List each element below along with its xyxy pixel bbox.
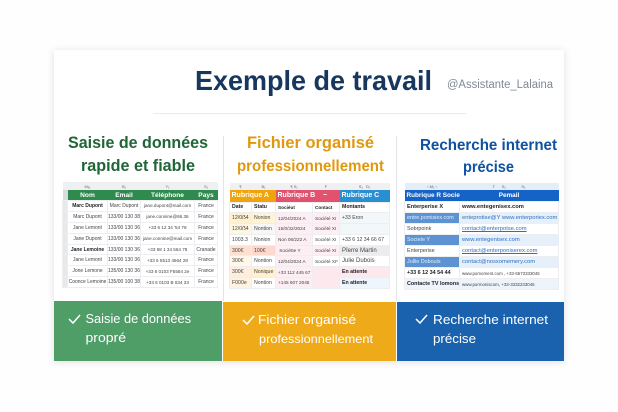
spreadsheet: data entry: Jane Lemont [73, 257, 102, 263]
spreadsheet: organised file: +145 607 2045 [278, 280, 309, 285]
spreadsheet: data entry: 133/00 130 36 [108, 246, 140, 252]
green band label [69, 311, 191, 345]
spreadsheet: data entry: Email [115, 192, 133, 198]
spreadsheet: organised file: 100€ [254, 248, 266, 254]
spreadsheet: data entry: France [198, 268, 214, 274]
orange band: organised file [223, 302, 396, 361]
spreadsheet: internet research: entre.pomisiex.com [407, 215, 454, 221]
green band: clean data entry [54, 301, 222, 361]
spreadsheet: data entry: jane.dupont@mail.com [144, 203, 191, 208]
heading: data entry: rapide et fiable [81, 157, 195, 175]
spreadsheet: internet research: Enterperise X [407, 204, 443, 210]
spreadsheet: data entry: Marc Dupont [73, 214, 102, 220]
green band label: propré [86, 330, 126, 345]
spreadsheet: data entry: France [198, 257, 214, 263]
spreadsheet: data entry [62, 182, 218, 288]
spreadsheet: organised file [229, 183, 390, 289]
spreadsheet: organised file: +33 112 445 67 [278, 270, 310, 275]
spreadsheet: internet research: +33 6 12 34 54 44 [407, 270, 451, 276]
spreadsheet: organised file: Sociétte Y [279, 248, 301, 253]
spreadsheet: organised file: 300€ [232, 258, 244, 264]
spreadsheet: internet research: www.pomoment.com , +33-5573333046 [462, 271, 540, 276]
spreadsheet: organised file: 1003.3 [232, 237, 248, 243]
spreadsheet: internet research: www.entegenisex.com [462, 237, 520, 243]
heading: data entry: Saisie de données [68, 134, 208, 152]
spreadsheet: organised file: Date [232, 204, 243, 210]
spreadsheet: data entry: Mₓ₁ [84, 184, 90, 188]
spreadsheet: internet research: contact@nosxomemery.com [462, 259, 535, 265]
spreadsheet: data entry: +33 6 12 34 '54 78 [148, 225, 187, 230]
spreadsheet: organised file: Société XI [315, 216, 336, 221]
heading: internet research: précise [463, 159, 514, 176]
spreadsheet: organised file: +33 6 12 34 66 67 [342, 237, 384, 243]
spreadsheet: organised file: 12/0ẞ4 [232, 215, 249, 221]
spreadsheet: internet research: enteprotise@Y www.enterporiex.com [462, 215, 557, 221]
spreadsheet: data entry: jane.connine@mail.com [143, 236, 192, 241]
spreadsheet: internet research: contact@enterponiserex.com [462, 248, 537, 254]
spreadsheet: organised file: F [325, 184, 327, 189]
spreadsheet: data entry: 133/00 130 36 [108, 257, 140, 263]
spreadsheet: organised file: Société XI [315, 248, 336, 253]
spreadsheet: internet research: www.pormoniscom, +33-3332233046 [462, 282, 535, 287]
spreadsheet: organised file: Nonique [254, 269, 273, 275]
heading: organised file: Fichier organisé [247, 134, 374, 152]
spreadsheet: data entry: +33 6 5513 4564 28 [147, 258, 188, 263]
spreadsheet: organised file: ¶ [239, 184, 242, 189]
title: Exemple de travail [195, 65, 432, 96]
spreadsheet: data entry: Jane Lemont [73, 225, 102, 231]
spreadsheet: organised file: 12/0ẞ4 [232, 226, 249, 232]
spreadsheet: organised file: Nonion [254, 215, 270, 221]
spreadsheet: organised file: Rubrique A [232, 192, 269, 199]
blue band label [416, 312, 548, 346]
spreadsheet: internet research: T S₁ S₁ [493, 184, 525, 189]
spreadsheet: organised file: Société XI [315, 237, 336, 242]
spreadsheet: organised file: Nonion [254, 237, 270, 243]
spreadsheet: data entry: Jane Dupont [73, 236, 102, 242]
spreadsheet: organised file: Société XF [315, 259, 338, 264]
blue band label: Recherche internet [433, 312, 548, 327]
spreadsheet: data entry: Téléphone [151, 192, 184, 198]
orange band label: professionnellement [259, 332, 374, 346]
spreadsheet: organised file: Julie Dubois [342, 258, 375, 264]
card panel [54, 50, 564, 361]
green band label: Saisie de données [86, 311, 191, 326]
heading: data entry [68, 134, 208, 175]
spreadsheet: internet research [404, 183, 559, 290]
spreadsheet: internet research: Pemail [499, 192, 519, 199]
orange band label: Fichier organisé [258, 312, 356, 327]
heading: internet research [420, 137, 558, 176]
column divider [223, 136, 224, 301]
spreadsheet: data entry: Pays [198, 192, 214, 198]
spreadsheet: data entry: Marc Dupont [72, 203, 103, 209]
spreadsheet: organised file: Rubrique C [342, 192, 379, 199]
spreadsheet: data entry: S₁ [204, 184, 208, 188]
spreadsheet: organised file: Rubrique B − [278, 192, 327, 199]
spreadsheet: organised file: 300€ [232, 269, 244, 275]
spreadsheet: data entry: 135/00 130 36 [108, 268, 140, 274]
spreadsheet: internet research: www.entegenisex.com [462, 204, 524, 210]
spreadsheet: organised file: Statu [254, 204, 267, 210]
spreadsheet: internet research: Sobrpoink [407, 226, 431, 232]
orange band label [243, 312, 374, 346]
blue band label: précise [433, 331, 476, 346]
spreadsheet: data entry: 133/00 130 36 [108, 225, 140, 231]
spreadsheet: organised file: +33 Eron [342, 215, 363, 221]
heading: internet research: Recherche internet [420, 137, 558, 154]
spreadsheet: internet research: Jullie Dobouis [407, 259, 441, 265]
spreadsheet: internet research: Societe Y [407, 237, 430, 243]
column divider [396, 136, 397, 301]
spreadsheet: data entry: France [198, 236, 214, 242]
spreadsheet: data entry: 133/00 130 36 [108, 236, 140, 242]
spreadsheet: organised file: ¶ S₁ [290, 184, 298, 189]
spreadsheet: internet research: Enterperise [407, 248, 435, 254]
spreadsheet: organised file: 12/04/2024 A [278, 216, 306, 221]
spreadsheet: organised file: S₁ D₁ [359, 184, 370, 189]
spreadsheet: data entry: France [198, 214, 214, 220]
spreadsheet: data entry: Marc Dupont [110, 203, 138, 209]
spreadsheet: data entry: Cranade [196, 246, 216, 252]
spreadsheet: data entry: +33 6 0103 B 634 33 [146, 280, 189, 285]
spreadsheet: data entry: Nom [80, 192, 95, 198]
spreadsheet: organised file: B₁ [261, 184, 266, 189]
spreadsheet: organised file: Non 06/222 A [278, 237, 306, 242]
spreadsheet: organised file: F000e [232, 280, 247, 286]
spreadsheet: data entry: France [198, 279, 214, 285]
spreadsheet: organised file: 12/04/2024 A [278, 259, 306, 264]
heading: organised file [237, 134, 384, 175]
spreadsheet: organised file: Nontion [254, 226, 272, 232]
spreadsheet: organised file: Nontion [254, 280, 272, 286]
spreadsheet: data entry: Jane Lemoine [71, 246, 104, 252]
spreadsheet: data entry: France [198, 225, 214, 231]
spreadsheet: internet research: contact@enterpotse.com [462, 226, 527, 232]
spreadsheet: organised file: Sociéut [278, 205, 295, 210]
spreadsheet: data entry: Y₁ [165, 184, 170, 188]
blue band: precise research [397, 302, 564, 361]
spreadsheet: organised file: 15/0/32/2024 [278, 226, 305, 231]
spreadsheet: data entry: 135/00 100 38 [108, 279, 140, 285]
spreadsheet: organised file: Nontion [254, 258, 272, 264]
spreadsheet: organised file: En attente [342, 269, 367, 275]
spreadsheet: data entry: Jone Lemone [72, 268, 103, 274]
spreadsheet: internet research: ‹ M₁ › [427, 184, 437, 189]
spreadsheet: organised file: Société XI [315, 226, 336, 231]
heading: organised file: professionnellement [237, 158, 384, 175]
spreadsheet: data entry: +33 68 1 34 564 78 [148, 247, 187, 252]
spreadsheet: data entry: B₁ [122, 184, 126, 188]
handle: @Assistante_Lalaina [447, 79, 554, 91]
spreadsheet: organised file: En attente [342, 280, 367, 286]
spreadsheet: data entry: 133/00 130 38 [108, 214, 140, 220]
spreadsheet: data entry: +33 6 0103 F5584 2e [146, 269, 189, 274]
spreadsheet: data entry: jane.connine@66.36 [146, 214, 189, 219]
spreadsheet: data entry: France [198, 203, 214, 209]
spreadsheet: organised file: 300€ [232, 248, 244, 254]
spreadsheet: organised file: Montants [342, 204, 365, 210]
spreadsheet: organised file: Pîerre Martin [342, 248, 377, 254]
spreadsheet: data entry: Coonce Lemoine [69, 279, 106, 285]
spreadsheet: organised file: Contact [315, 205, 332, 210]
